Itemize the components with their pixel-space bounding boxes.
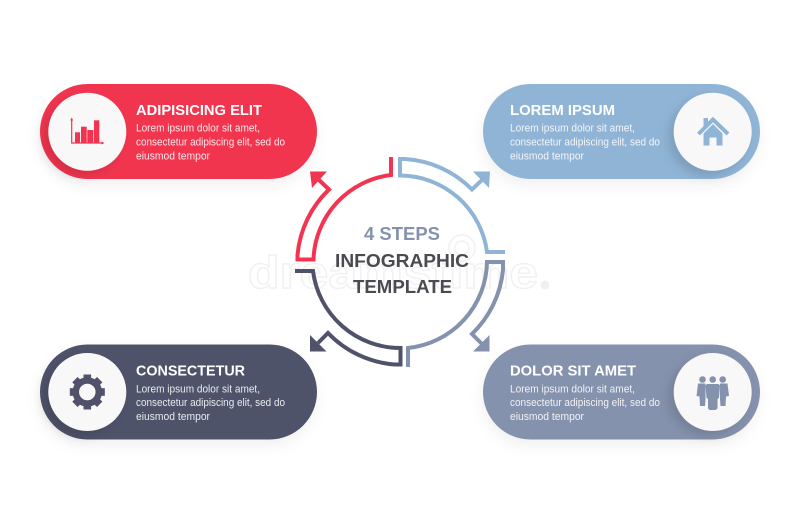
- text block: eiusmod tempor: [136, 411, 210, 423]
- icon: people: [674, 353, 752, 431]
- text block: consectetur adipiscing elit, sed do: [136, 137, 285, 149]
- text block: consectetur adipiscing elit, sed do: [510, 397, 660, 409]
- text block: eiusmod tempor: [510, 411, 584, 423]
- title: INFOGRAPHIC: [335, 250, 469, 271]
- text block: consectetur adipiscing elit, sed do: [510, 137, 660, 149]
- text block: Lorem ipsum dolor sit amet,: [510, 123, 635, 135]
- watermark: dreamstime: [248, 247, 538, 298]
- heading: DOLOR SIT AMET: [510, 363, 636, 380]
- title: 4 STEPS: [364, 223, 440, 244]
- icon: gear: [48, 353, 126, 431]
- title: TEMPLATE: [353, 276, 452, 297]
- panel: dolor sit amet: [483, 344, 760, 440]
- panel: lorem ipsum: [483, 84, 760, 179]
- panel: adipisicing elit: [40, 84, 317, 179]
- text block: Lorem ipsum dolor sit amet,: [136, 383, 260, 395]
- text block: consectetur adipiscing elit, sed do: [136, 397, 285, 409]
- arrow: gray: [408, 262, 503, 367]
- text block: Lorem ipsum dolor sit amet,: [510, 383, 635, 395]
- text block: [136, 123, 285, 162]
- text block: eiusmod tempor: [136, 150, 210, 162]
- arrow: red: [298, 157, 391, 260]
- text block: [510, 383, 660, 423]
- heading: LOREM IPSUM: [510, 102, 615, 119]
- text block: Lorem ipsum dolor sit amet,: [136, 123, 260, 135]
- text block: [510, 123, 660, 162]
- heading: ADIPISICING ELIT: [136, 102, 262, 119]
- text block: [136, 383, 285, 423]
- watermark: [248, 235, 550, 298]
- text block: eiusmod tempor: [510, 150, 584, 162]
- arrow: light blue: [400, 159, 505, 252]
- heading: CONSECTETUR: [136, 363, 245, 380]
- icon: bar chart: [48, 93, 126, 171]
- arrow: dark: [295, 271, 400, 364]
- icon: house: [674, 93, 752, 171]
- title: [335, 223, 469, 297]
- panel: consectetur: [40, 344, 317, 440]
